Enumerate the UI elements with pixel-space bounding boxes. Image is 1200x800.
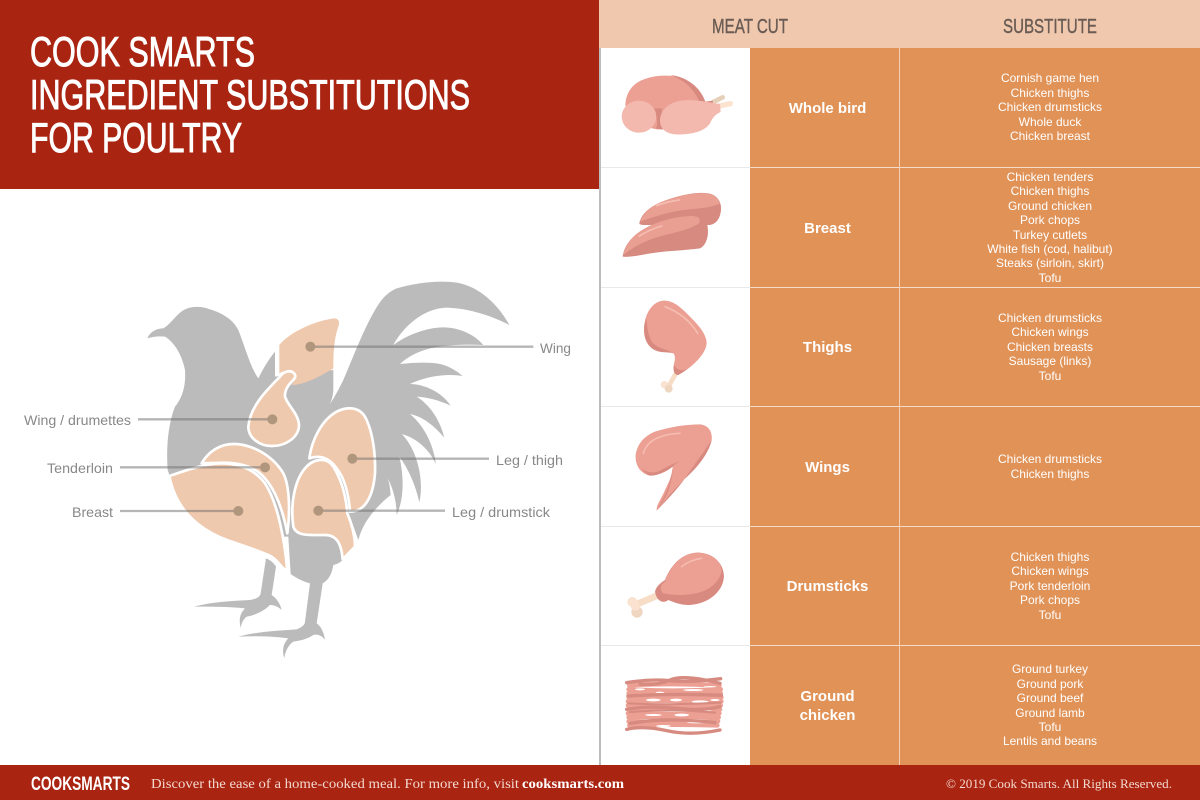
substitutes: drumsticks	[900, 527, 1200, 645]
substitutes: wings: Chicken thighs	[1011, 466, 1089, 480]
label: thighs	[750, 288, 900, 406]
substitutes: breast: Pork chops	[1020, 213, 1080, 227]
substitutes: thighs: Tofu	[1039, 369, 1061, 383]
substitutes: drumsticks: Pork chops	[1020, 593, 1080, 607]
substitutes: breast: White fish (cod, halibut)	[987, 242, 1113, 256]
substitutes: drumsticks: Pork tenderloin	[1010, 579, 1090, 593]
leader lines	[120, 347, 533, 511]
substitutes: ground chicken	[900, 646, 1200, 765]
rooster silhouette	[147, 282, 509, 658]
substitutes: drumsticks: Tofu	[1039, 608, 1061, 622]
leader dots	[233, 342, 357, 516]
substitutes: thighs: Chicken breasts	[1007, 340, 1093, 354]
label: breast: Breast	[804, 220, 851, 236]
substitutes: ground chicken: Ground turkey	[1012, 662, 1088, 676]
icon: ground chicken	[625, 676, 724, 735]
icon: thighs	[644, 300, 707, 393]
icon: breast	[622, 192, 721, 257]
cut labels: Breast	[72, 504, 113, 520]
row: breast	[600, 168, 1200, 287]
table header	[599, 0, 1200, 48]
substitutes: thighs: Sausage (links)	[1009, 354, 1091, 368]
icon: whole bird	[622, 75, 733, 134]
label: drumsticks	[750, 527, 900, 645]
label: whole bird	[750, 48, 900, 167]
column divider	[599, 48, 601, 765]
column headings: MEAT CUT	[712, 15, 788, 38]
substitutes: whole bird: Whole duck	[1019, 115, 1081, 129]
substitutes: breast: Chicken thighs	[1011, 184, 1089, 198]
substitutes: whole bird: Chicken thighs	[1011, 86, 1089, 100]
substitutes: breast: Ground chicken	[1008, 199, 1092, 213]
substitutes: drumsticks: Chicken wings	[1011, 564, 1089, 578]
substitutes: ground chicken: Lentils and beans	[1003, 734, 1097, 748]
substitutes: drumsticks: Chicken thighs	[1011, 550, 1089, 564]
substitutes: thighs	[900, 288, 1200, 406]
copyright: © 2019 Cook Smarts. All Rights Reserved.	[946, 776, 1172, 791]
icon: drumstick	[627, 552, 724, 618]
label: breast	[750, 168, 900, 287]
cut labels: Tenderloin	[47, 460, 113, 476]
substitutes: whole bird: Cornish game hen	[1001, 71, 1099, 85]
row: wings	[600, 407, 1200, 526]
label: drumsticks: Drumsticks	[787, 578, 868, 595]
footer	[0, 765, 1200, 800]
label: ground chicken: Ground	[800, 688, 855, 705]
substitutes: ground chicken: Ground beef	[1017, 691, 1083, 705]
title text: COOK SMARTS	[30, 28, 255, 75]
substitutes: ground chicken: Ground pork	[1017, 677, 1083, 691]
footer link: cooksmarts.com	[522, 776, 625, 791]
footer tagline: Discover the ease of a home-cooked meal. For more info, visit	[151, 776, 519, 791]
substitutes: wings	[900, 407, 1200, 526]
rooster diagram with cut labels	[24, 282, 571, 658]
substitutes: ground chicken: Ground lamb	[1015, 706, 1085, 720]
label: whole bird: Whole bird	[789, 100, 866, 116]
label: thighs: Thighs	[803, 339, 852, 356]
title banner	[0, 0, 600, 189]
substitutes: thighs: Chicken wings	[1011, 325, 1089, 339]
label: wings	[750, 407, 900, 526]
column headings	[712, 15, 1097, 38]
column headings: SUBSTITUTE	[1003, 15, 1097, 38]
row: whole bird	[600, 48, 1200, 167]
row: thighs	[600, 288, 1200, 406]
title text: FOR POULTRY	[30, 114, 242, 161]
substitutes: breast: Tofu	[1039, 271, 1061, 285]
substitutes: whole bird: Chicken breast	[1010, 129, 1090, 143]
substitutes: breast: Turkey cutlets	[1013, 228, 1087, 242]
cut labels: Leg / drumstick	[452, 504, 551, 520]
row: drumsticks	[600, 527, 1200, 645]
label: wings: Wings	[805, 458, 850, 476]
substitutes: breast: Steaks (sirloin, skirt)	[996, 256, 1104, 270]
substitutes: whole bird	[900, 48, 1200, 167]
substitutes: ground chicken: Tofu	[1039, 720, 1061, 734]
cut labels: Wing	[540, 340, 571, 356]
substitutes: breast: Chicken tenders	[1007, 170, 1093, 184]
peach cut regions	[169, 318, 375, 572]
substitutes: breast	[900, 168, 1200, 287]
row: ground chicken	[600, 646, 1200, 765]
cut labels	[24, 340, 571, 520]
cut labels: Wing / drumettes	[24, 412, 131, 428]
substitutes: whole bird: Chicken drumsticks	[998, 100, 1102, 114]
cut labels: Leg / thigh	[496, 452, 563, 468]
title text	[30, 28, 470, 161]
icon: wings	[636, 424, 712, 510]
footer logo: COOKSMARTS	[31, 774, 130, 795]
substitutes: thighs: Chicken drumsticks	[998, 311, 1102, 325]
label: ground chicken	[750, 646, 900, 765]
substitutes: wings: Chicken drumsticks	[998, 452, 1102, 466]
label: ground chicken: chicken	[800, 707, 855, 724]
